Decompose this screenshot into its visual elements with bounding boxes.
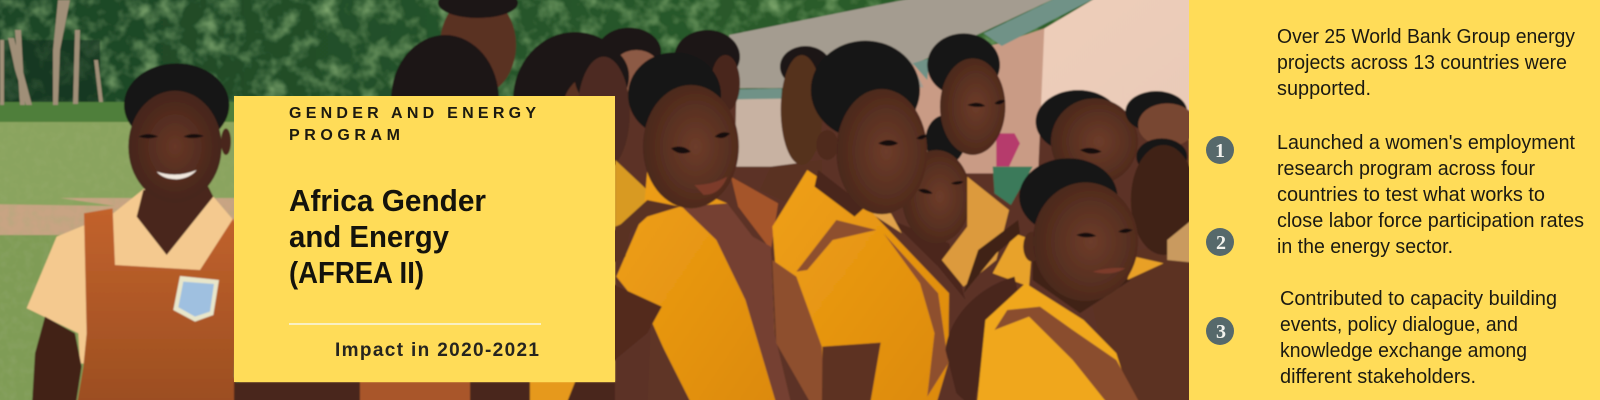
heads above the title box [391,0,638,168]
number badge 3: 3 [1216,321,1226,343]
impact text 1: projects across 13 countries were [1277,52,1567,74]
tall girl at back [927,33,1005,155]
left girl: hair [124,63,229,147]
shaded wall [913,28,1044,173]
roof fascia [737,0,1111,99]
impact text 3 [1280,288,1557,388]
number badge 3 [1206,317,1234,345]
back girl in centre [731,46,831,250]
impact text 1: Over 25 World Bank Group energy [1277,26,1575,48]
front girl [945,158,1144,400]
impact text 2: Launched a women's employment [1277,132,1575,154]
impact text 2: in the energy sector. [1277,236,1453,258]
wall of building [1040,0,1200,113]
number badge 1: 1 [1215,140,1225,162]
impact text 3: Contributed to capacity building [1280,288,1557,310]
number badge 2: 2 [1216,232,1226,254]
roof [729,0,1073,88]
girl with shirt, left [611,52,793,400]
centre photo area [575,0,1200,400]
eyebrow: program name: GENDER AND ENERGY [289,105,536,122]
left girl: shirt and collar [27,187,233,377]
left girl: neck [137,187,213,255]
left girl: ear [221,128,231,155]
girl behind, centre right [871,115,1009,300]
title box [234,96,615,382]
right back girls [1036,90,1200,400]
photo background: trees and grass [0,0,1220,400]
central girl [772,41,949,400]
left girl: arm [32,317,82,400]
main title: (AFREA II) [289,255,424,290]
divider line [289,323,541,325]
number badge 1 [1206,136,1234,164]
impact text 1: supported. [1277,78,1371,100]
impact text 3: events, policy dialogue, and [1280,314,1518,336]
far-left girl [575,28,740,227]
right panel: impact list [1189,0,1600,400]
left girl: eyes [138,134,204,138]
left girl: smile [157,170,197,179]
green cloth [993,167,1033,205]
eyebrow: program name: PROGRAM [289,127,400,144]
photo: schoolgirls in orange uniforms [0,0,1220,400]
left girl: pinafore [76,208,245,400]
main title: and Energy [289,219,450,254]
impact text 1 [1277,26,1575,100]
subtitle: impact period: Impact in 2020-2021 [335,340,539,361]
left girl [27,63,245,400]
impact text 2 [1277,132,1584,258]
pink cloth [996,133,1020,167]
main title [289,183,486,290]
bottom edge figures [234,382,615,400]
left girl: face [128,91,222,203]
impact text 2: close labor force participation rates [1277,210,1584,232]
central girl: pinafore straps [772,220,948,400]
number badge 2 [1206,228,1234,256]
interior below roof [735,97,804,167]
eyebrow: program name [289,105,536,144]
left girl: school badge [173,276,219,322]
main title: Africa Gender [289,183,486,218]
impact text 2: research program across four [1277,158,1535,180]
centre base shadow between figures [615,100,1189,400]
impact text 3: different stakeholders. [1280,366,1476,388]
impact text 2: countries to test what works to [1277,184,1545,206]
impact text 3: knowledge exchange among [1280,340,1527,362]
